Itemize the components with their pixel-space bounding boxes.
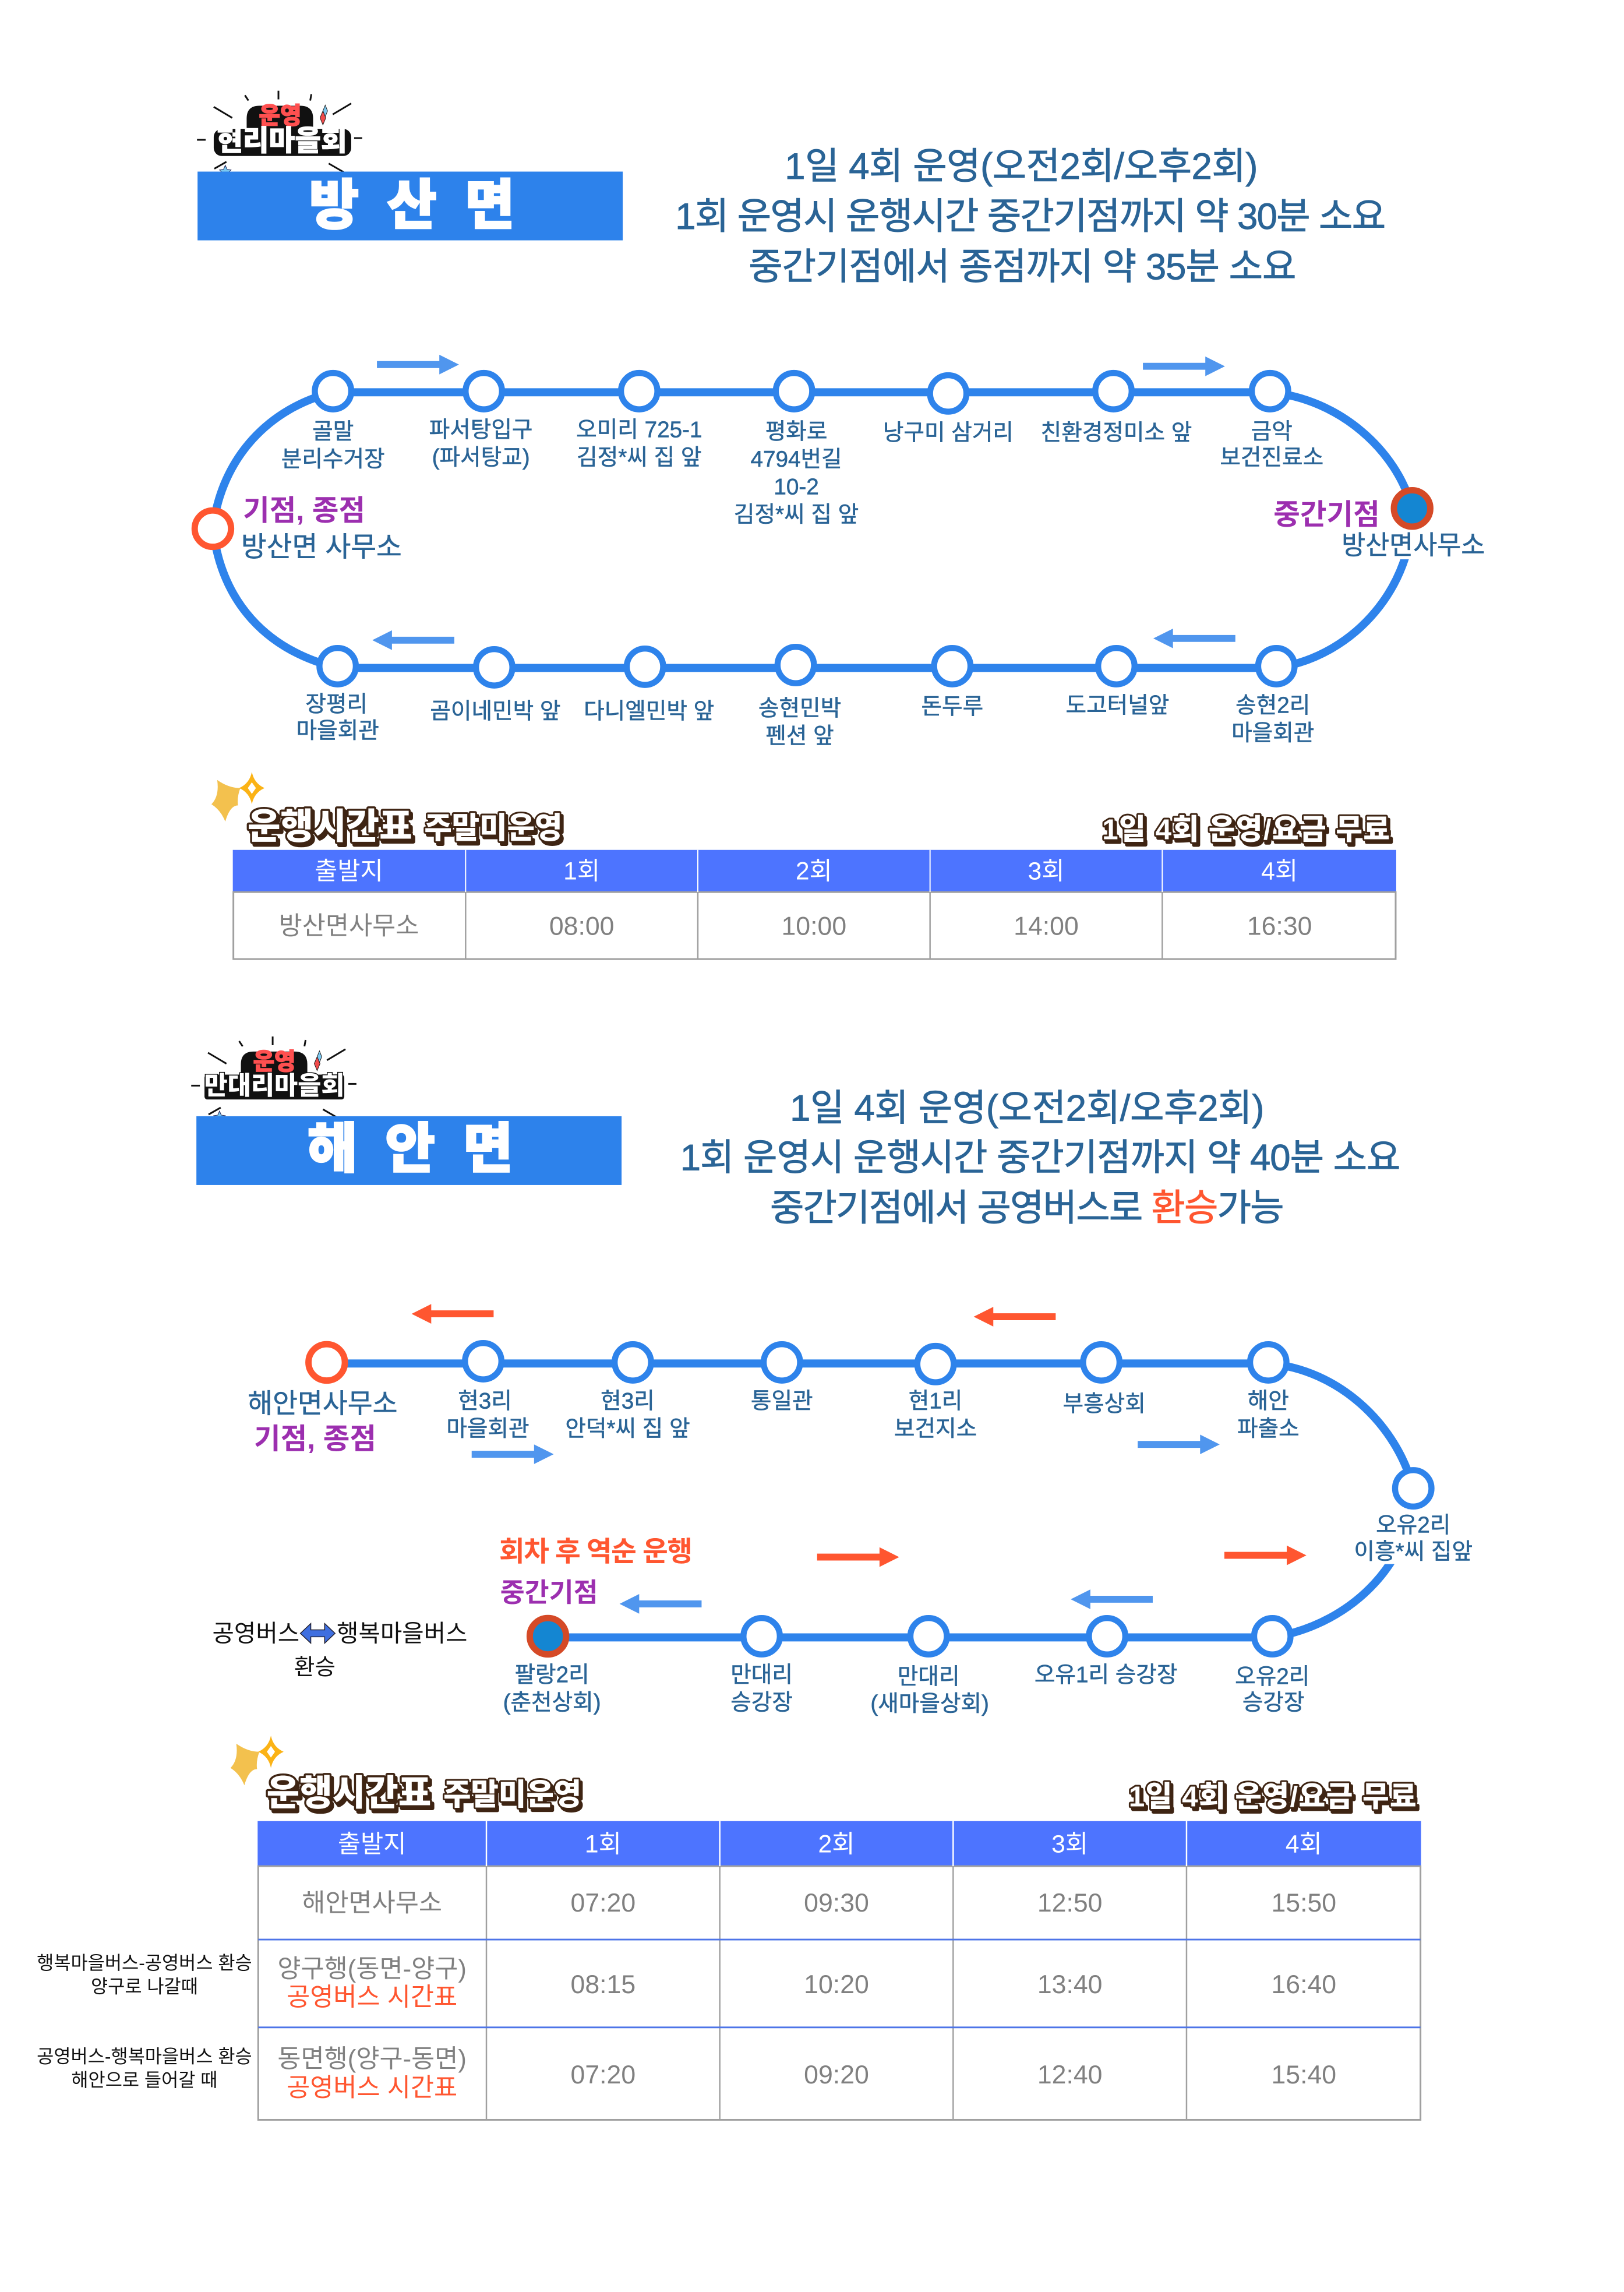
timetable: 방산면: 14:00 <box>1014 912 1079 940</box>
stop: 중간기점 팔랑2리: 중간기점 <box>500 1578 598 1607</box>
heading: 운영 안내: 1회 운영시 운행시간 중간기점까지 약 40분 소요 <box>680 1138 1400 1179</box>
stop: 평화로 4794번길 10-2: 김정*씨 집 앞 <box>734 502 859 527</box>
icon: sparkle stars <box>211 772 264 821</box>
stop: 송현민박 펜션 앞: 송현민박 <box>758 696 841 721</box>
stop: 곰이네민박 앞: 곰이네민박 앞 <box>430 699 560 724</box>
timetable: 해안면: 3회 <box>1051 1830 1088 1858</box>
stop: 만대리 승강장 <box>730 1618 793 1715</box>
arrow: 진행 방향 <box>1153 629 1235 648</box>
stop: 다니엘민박 앞 <box>584 648 714 724</box>
stop: 금악 보건진료소: 금악 <box>1251 419 1293 444</box>
stop: 현3리 안덕*씨 집 앞 <box>565 1344 690 1441</box>
stop: 송현2리 마을회관: 송현2리 <box>1235 693 1310 718</box>
timetable title: 해안면: 1일 4회 운영/요금 무료 <box>1129 1780 1417 1813</box>
timetable: 해안면: 2회 <box>818 1830 855 1858</box>
arrow: 진행 방향 <box>1071 1589 1153 1609</box>
stop: 오유2리 이흥*씨 집앞 <box>1353 1470 1473 1564</box>
stop: 해안 파출소: 해안 <box>1248 1388 1289 1413</box>
icon: sparkle stars <box>231 1736 284 1785</box>
banner: 방산면: 방 산 면 <box>309 175 515 236</box>
stop: 도고터널앞 <box>1066 648 1169 718</box>
panel: 방산면 노선 안내 <box>195 91 1485 960</box>
timetable: 방산면: 08:00 <box>549 912 614 940</box>
note: 공영버스 행복마을버스 환승: 공영버스 <box>213 1620 299 1647</box>
callout: 회차 후 역순 운행: 회차 후 역순 운행 <box>499 1536 693 1567</box>
arrow: 진행 방향 <box>372 630 454 650</box>
stop: 현3리 안덕*씨 집 앞: 현3리 <box>601 1388 655 1413</box>
stop: 도고터널앞: 도고터널앞 <box>1066 693 1169 718</box>
timetable: 해안면: 출발지 <box>338 1830 406 1858</box>
timetable: 방산면: 10:00 <box>782 912 846 940</box>
stop: 오유1리 승강장 <box>1035 1618 1177 1687</box>
timetable: 해안면: 08:15 <box>571 1970 636 1999</box>
timetable: 해안면: 13:40 <box>1037 1970 1102 1999</box>
timetable: 해안면 <box>257 1821 1421 2120</box>
timetable: 방산면: 2회 <box>796 857 832 885</box>
stop: 중간기점 팔랑2리: (춘천상회) <box>503 1690 601 1715</box>
arrow: 회차 방향 <box>817 1547 899 1567</box>
timetable title: 해안면: 주말미운영 <box>446 1780 584 1814</box>
sticker: 현리마을회 운영: 운영 <box>259 103 301 129</box>
note: 해안으로 들어갈 때: 공영버스-행복마을버스 환승 <box>37 2046 252 2067</box>
arrow: 진행 방향 <box>472 1444 554 1464</box>
icon: double arrow <box>301 1624 335 1643</box>
timetable: 방산면: 4회 <box>1261 857 1298 885</box>
stop: 오미리 725-1: 오미리 725-1 <box>576 417 702 442</box>
stop: 중간기점 방산면사무소 <box>1273 490 1485 560</box>
panel: 해안면 노선 안내 <box>37 1036 1473 2120</box>
note: 공영버스 행복마을버스 환승 <box>213 1620 467 1680</box>
timetable: 방산면: 3회 <box>1028 857 1064 885</box>
stop: 오유2리 승강장: 승강장 <box>1242 1690 1305 1715</box>
heading: 운영 안내 <box>680 1088 1400 1229</box>
timetable title: 방산면: 운행시간표 <box>248 807 412 847</box>
stop: 평화로 4794번길 10-2: 4794번길 <box>751 447 842 472</box>
stop: 돈두루 <box>921 648 983 719</box>
sticker: 현리마을회 운영: 현리마을회 <box>217 125 347 157</box>
arrow: 역방향 <box>974 1307 1055 1327</box>
timetable: 해안면: 공영버스 시간표 <box>287 2074 457 2102</box>
timetable: 방산면: 출발지 <box>315 857 383 885</box>
stop: 파서탕입구: (파서탕교) <box>432 445 530 470</box>
stop: 오유2리 승강장 <box>1235 1618 1309 1715</box>
stop: 평화로 4794번길 10-2: 10-2 <box>774 475 819 500</box>
stop: 해안면사무소 기점 종점: 해안면사무소 <box>248 1388 397 1419</box>
note: 양구로 나갈때: 양구로 나갈때 <box>91 1976 198 1997</box>
heading: 운영 안내: 중간기점에서 공영버스로 환승가능 <box>770 1188 1284 1229</box>
timetable: 해안면: 4회 <box>1286 1830 1322 1858</box>
timetable title: 방산면: 운행시간표 <box>250 810 415 850</box>
timetable: 해안면: 12:50 <box>1037 1889 1102 1917</box>
stop: 오유1리 승강장: 오유1리 승강장 <box>1035 1662 1177 1687</box>
stop: 해안 파출소 <box>1237 1344 1300 1441</box>
timetable: 해안면: 07:20 <box>571 1889 636 1917</box>
stop: 중간기점 방산면사무소: 중간기점 <box>1273 498 1380 531</box>
timetable: 방산면: 1회 <box>563 857 600 885</box>
timetable: 해안면: 양구행(동면-양구) <box>277 1955 467 1983</box>
stop: 평화로 4794번길 10-2 <box>734 373 859 527</box>
note: 양구로 나갈때: 행복마을버스-공영버스 환승 <box>37 1952 252 1973</box>
stop: 평화로 4794번길 10-2: 평화로 <box>765 419 827 444</box>
stop: 현3리 마을회관: 마을회관 <box>446 1416 529 1441</box>
banner: 해안면 <box>196 1116 622 1185</box>
timetable title: 해안면 <box>231 1736 1419 1817</box>
timetable: 해안면: 12:40 <box>1037 2061 1102 2089</box>
stop: 통일관 <box>751 1344 813 1413</box>
route map: 방산면 순환 노선 <box>195 355 1485 749</box>
stop: 곰이네민박 앞 <box>430 649 560 724</box>
banner: 해안면: 해 안 면 <box>308 1119 513 1179</box>
timetable: 해안면: 09:30 <box>804 1889 869 1917</box>
stop: 통일관: 통일관 <box>751 1388 813 1413</box>
stop: 현3리 마을회관 <box>446 1343 529 1441</box>
timetable: 해안면: 15:50 <box>1271 1889 1336 1917</box>
stop: 만대리 승강장: 승강장 <box>730 1690 793 1715</box>
stop: 낭구미 삼거리 <box>883 375 1014 445</box>
timetable title: 방산면: 1일 4회 운영/요금 무료 <box>1102 813 1390 845</box>
sticker: 만대리마을회 운영: 만대리마을회 <box>204 1073 344 1101</box>
timetable: 해안면: 해안면사무소 <box>302 1889 442 1917</box>
stop: 현1리 보건지소 <box>894 1346 977 1441</box>
stop: 오유2리 이흥*씨 집앞: 오유2리 <box>1376 1513 1450 1538</box>
stop: 골말 분리수거장 <box>281 373 385 472</box>
timetable title: 방산면: 주말미운영 <box>426 814 564 848</box>
timetable: 해안면: 동면행(양구-동면) <box>277 2046 467 2074</box>
arrow: 진행 방향 <box>620 1594 701 1614</box>
stop: 송현민박 펜션 앞 <box>758 647 841 749</box>
stop: 해안 파출소: 파출소 <box>1237 1416 1300 1441</box>
sticker: 만대리마을회 운영: 운영 <box>253 1049 296 1075</box>
timetable title: 해안면: 1일 4회 운영/요금 무료 <box>1131 1783 1419 1815</box>
note: 양구로 나갈때 <box>37 1952 252 1997</box>
heading: 운영 안내: 1회 운영시 운행시간 중간기점까지 약 30분 소요 <box>675 196 1386 237</box>
stop: 송현2리 마을회관: 마을회관 <box>1231 721 1314 746</box>
stop: 친환경정미소 앞: 친환경정미소 앞 <box>1041 420 1192 445</box>
timetable title: 방산면 <box>211 772 1392 850</box>
timetable title: 해안면: 운행시간표 <box>269 1776 433 1817</box>
stop: 중간기점 팔랑2리 <box>500 1578 601 1715</box>
timetable: 해안면: 09:20 <box>804 2061 869 2089</box>
stop: 골말 분리수거장: 골말 <box>312 419 354 444</box>
note: 공영버스 행복마을버스 환승: 환승 <box>294 1655 336 1680</box>
timetable: 해안면: 1회 <box>585 1830 622 1858</box>
stop: 중간기점 방산면사무소: 방산면사무소 <box>1341 531 1485 560</box>
arrow: 역방향 <box>412 1304 493 1324</box>
stop: 부흥상회 <box>1063 1344 1146 1416</box>
timetable title: 해안면: 운행시간표 <box>267 1773 431 1814</box>
arrow: 회차 방향 <box>1224 1546 1307 1565</box>
stop: 송현민박 펜션 앞: 펜션 앞 <box>765 724 834 749</box>
stop: 돈두루: 돈두루 <box>921 694 983 719</box>
stop: 기점 종점 방산면 사무소 <box>195 494 402 563</box>
sticker: 만대리마을회 운영 <box>191 1036 356 1123</box>
stop: 장평리 마을회관 <box>296 648 379 743</box>
note: 공영버스 행복마을버스 환승: 행복마을버스 <box>337 1620 467 1647</box>
stop: 만대리 새마을상회: 만대리 <box>898 1664 960 1689</box>
stop: 금악 보건진료소: 보건진료소 <box>1220 445 1323 470</box>
stop: 만대리 새마을상회: (새마을상회) <box>870 1691 989 1716</box>
note: 해안으로 들어갈 때 <box>37 2046 252 2090</box>
banner: 방산면 <box>197 172 623 241</box>
stop: 장평리 마을회관: 마을회관 <box>296 718 379 743</box>
route map: 해안면 노선 <box>248 1304 1473 1716</box>
timetable: 해안면: 공영버스 시간표 <box>287 1984 457 2012</box>
sticker: 현리마을회 운영 <box>197 91 362 177</box>
stop: 현1리 보건지소: 현1리 <box>909 1388 962 1413</box>
stop: 골말 분리수거장: 분리수거장 <box>281 447 385 472</box>
timetable: 해안면: 15:40 <box>1271 2061 1336 2089</box>
stop: 기점 종점 방산면 사무소: 기점, 종점 <box>243 494 365 527</box>
heading: 운영 안내: 1일 4회 운영(오전2회/오후2회) <box>790 1088 1264 1129</box>
stop: 송현2리 마을회관 <box>1231 648 1314 746</box>
timetable: 해안면: 07:20 <box>571 2061 636 2089</box>
stop: 만대리 새마을상회 <box>870 1618 989 1716</box>
arrow: 진행 방향 <box>377 355 459 375</box>
stop: 현1리 보건지소: 보건지소 <box>894 1416 977 1441</box>
timetable: 방산면 <box>233 850 1396 960</box>
stop: 파서탕입구: 파서탕입구 <box>429 417 533 442</box>
stop: 친환경정미소 앞 <box>1041 373 1192 445</box>
stop: 오유2리 이흥*씨 집앞: 이흥*씨 집앞 <box>1354 1539 1473 1564</box>
timetable title: 해안면: 주말미운영 <box>443 1778 581 1811</box>
stop: 오유2리 승강장: 오유2리 <box>1235 1664 1309 1689</box>
stop: 중간기점 팔랑2리: 팔랑2리 <box>514 1662 589 1687</box>
heading: 운영 안내: 중간기점에서 종점까지 약 35분 소요 <box>749 246 1296 287</box>
stop: 부흥상회: 부흥상회 <box>1063 1391 1146 1416</box>
stop: 해안면사무소 기점 종점 <box>248 1344 397 1455</box>
stop: 현3리 안덕*씨 집 앞: 안덕*씨 집 앞 <box>565 1416 690 1441</box>
stop: 현3리 마을회관: 현3리 <box>458 1388 512 1413</box>
note: 해안으로 들어갈 때: 해안으로 들어갈 때 <box>71 2069 217 2090</box>
timetable title: 방산면: 1일 4회 운영/요금 무료 <box>1104 816 1392 848</box>
arrow: 진행 방향 <box>1138 1434 1220 1454</box>
timetable title: 방산면: 주말미운영 <box>424 811 562 845</box>
timetable: 해안면: 16:40 <box>1271 1970 1336 1999</box>
stop: 파서탕입구 <box>429 373 533 470</box>
timetable: 방산면: 16:30 <box>1247 912 1312 940</box>
stop: 오미리 725-1: 김정*씨 집 앞 <box>577 445 702 470</box>
stop: 오미리 725-1 <box>576 373 702 470</box>
stop: 낭구미 삼거리: 낭구미 삼거리 <box>883 420 1014 445</box>
stop: 만대리 승강장: 만대리 <box>730 1662 793 1687</box>
stop: 다니엘민박 앞: 다니엘민박 앞 <box>584 699 714 724</box>
heading: 운영 안내 <box>675 146 1386 287</box>
stop: 해안면사무소 기점 종점: 기점, 종점 <box>254 1423 376 1455</box>
stop: 기점 종점 방산면 사무소: 방산면 사무소 <box>241 532 402 563</box>
stop: 금악 보건진료소 <box>1220 373 1323 470</box>
timetable: 해안면: 10:20 <box>804 1970 869 1999</box>
heading: 운영 안내: 1일 4회 운영(오전2회/오후2회) <box>785 146 1258 187</box>
stop: 장평리 마을회관: 장평리 <box>305 692 368 717</box>
timetable: 방산면: 방산면사무소 <box>279 912 419 940</box>
arrow: 진행 방향 <box>1143 357 1225 376</box>
